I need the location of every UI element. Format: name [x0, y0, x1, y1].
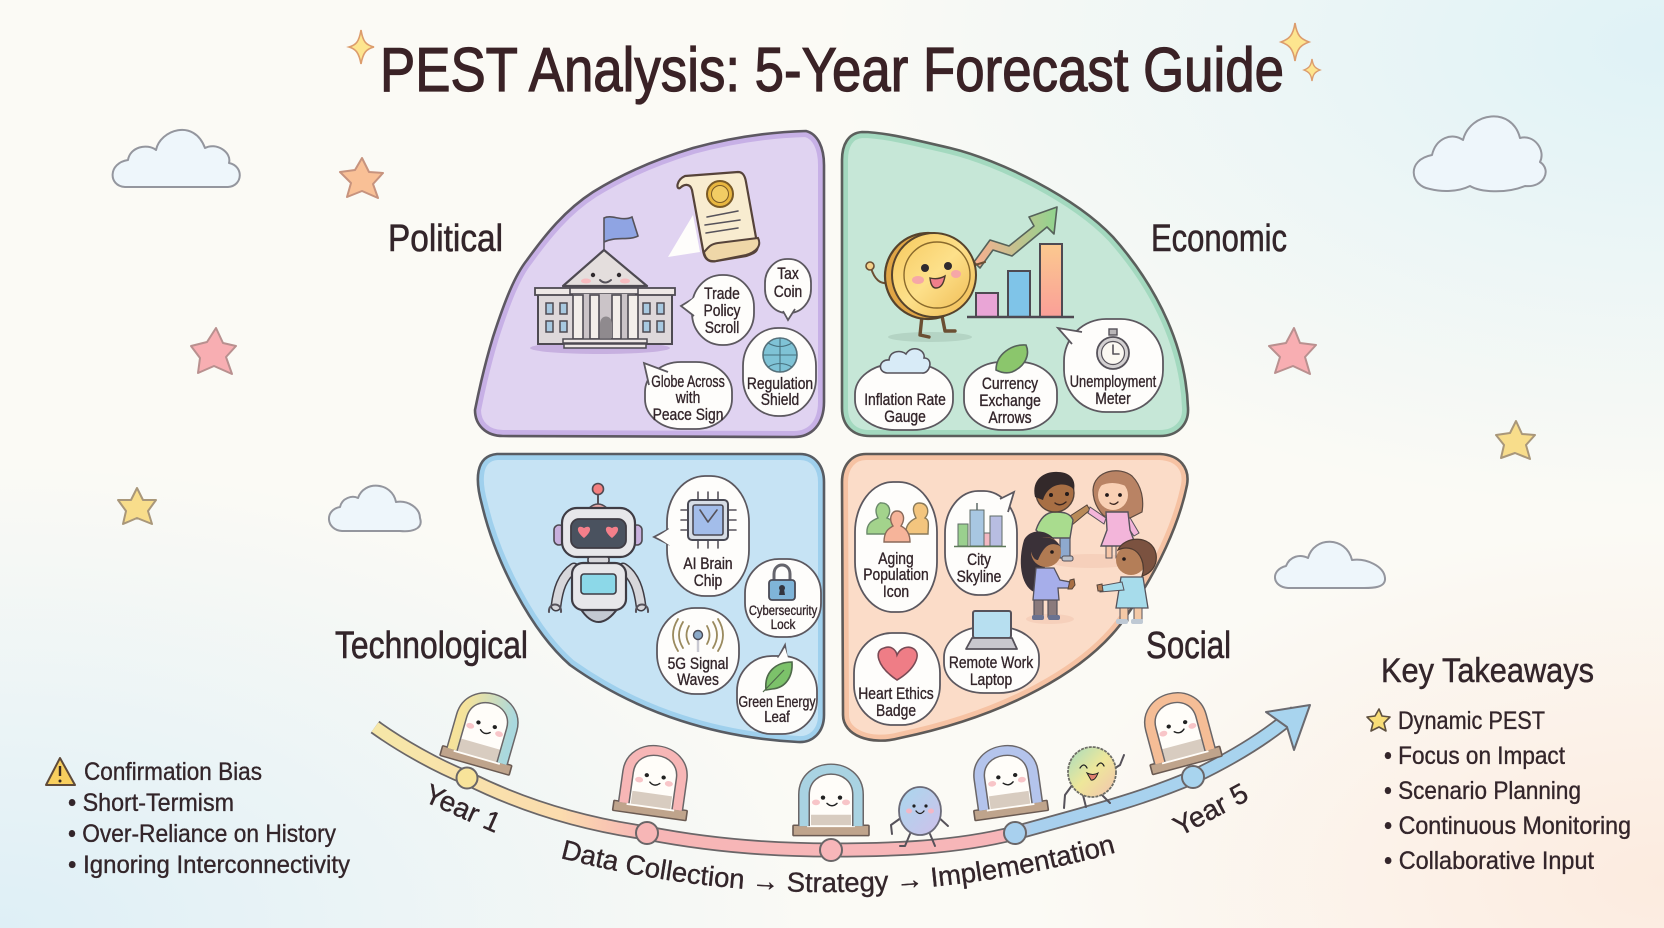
bubble: ai brain chip: Chip [694, 572, 722, 590]
bubble: currency exchange arrows: Arrows [988, 409, 1032, 427]
bubble: green energy leaf [737, 645, 817, 734]
bubble: trade policy scroll [681, 275, 754, 345]
bubble: cybersecurity lock: Lock [771, 616, 796, 632]
bubble: currency exchange arrows [964, 345, 1057, 430]
timeline: curved road with arrow [375, 705, 1310, 861]
star: top left [340, 158, 383, 198]
bubble: regulation shield: Regulation [747, 375, 813, 393]
bubble: aging population icon: Aging [878, 550, 914, 568]
label: process steps: Data Collection → Strategy → Implementation [562, 839, 1115, 898]
panel: social [842, 454, 1188, 741]
child: purple shirt girl [1021, 532, 1075, 620]
bubble: currency exchange arrows: Currency [982, 375, 1038, 393]
bubble: 5g signal waves: Waves [677, 671, 719, 689]
bubble: remote work laptop: Remote Work [949, 654, 1034, 672]
panel: economic [842, 132, 1188, 436]
bubble: tax coin: Coin [774, 283, 802, 301]
star: left yellow [118, 488, 156, 524]
bubble: currency exchange arrows: Exchange [979, 392, 1041, 410]
bubble: globe across with peace sign: Globe Across [651, 373, 725, 392]
bubble: 5g signal waves [657, 608, 739, 694]
milestone node: year 5 [1182, 766, 1204, 788]
bubble: trade policy scroll: Trade [704, 285, 740, 303]
bubble: tax coin: Tax [777, 265, 799, 283]
bubble: heart ethics badge: Badge [876, 702, 916, 720]
bubble: city skyline [945, 491, 1017, 595]
bubble: inflation rate gauge [855, 349, 953, 430]
text: short-termism: • Short-Termism [68, 789, 234, 817]
icon: robot [549, 484, 648, 622]
bubble: cybersecurity lock [745, 559, 821, 637]
blob character: rainbow [1064, 747, 1124, 808]
arrow head [1266, 705, 1310, 750]
heading: Social: Social [1146, 625, 1231, 667]
label: year 1: Year 1 [420, 778, 506, 839]
icon: government building [530, 217, 675, 354]
cloud: top right [1414, 116, 1546, 191]
text: collaborative input: • Collaborative Input [1384, 847, 1594, 875]
milestone node: year 1 [456, 768, 478, 788]
title: PEST Analysis: 5-Year Forecast Guide [380, 36, 1284, 105]
bubble: aging population icon: Population [863, 566, 929, 584]
bubble: globe across with peace sign [644, 362, 732, 429]
blob character: blue [891, 787, 948, 846]
bubble: globe across with peace sign: Peace Sign [653, 406, 723, 424]
arrow: growth [974, 207, 1057, 268]
text: focus on impact: • Focus on Impact [1384, 742, 1565, 770]
bubble: remote work laptop: Laptop [970, 671, 1012, 689]
bubble: inflation rate gauge: Inflation Rate [864, 391, 946, 409]
child: green shirt boy [1034, 472, 1090, 561]
milestone node: implementation [1004, 822, 1026, 844]
icon: warning triangle [46, 758, 75, 785]
bubble: remote work laptop [944, 611, 1039, 693]
bubble: city skyline: Skyline [957, 568, 1001, 586]
arch character: strategy [793, 769, 869, 836]
icon: sparkle right large [1281, 23, 1309, 61]
bubble: regulation shield [743, 328, 816, 416]
text: dynamic pest: Dynamic PEST [1398, 707, 1545, 735]
bubble: aging population icon: Icon [883, 583, 909, 601]
cloud: top left [113, 130, 240, 187]
bubble: unemployment meter: Unemployment [1070, 374, 1156, 391]
bubble: aging population icon [855, 482, 937, 612]
panel: pitfalls [46, 758, 350, 879]
icon: scroll [668, 172, 759, 261]
bubble: heart ethics badge [854, 633, 940, 725]
bubble: unemployment meter [1058, 319, 1163, 412]
bubble: tax coin [765, 259, 811, 320]
heading: Economic: Economic [1151, 218, 1287, 260]
heading: Political: Political [388, 218, 503, 260]
bubble: city skyline: City [967, 551, 991, 569]
arch character: data collection [613, 746, 695, 821]
bubble: green energy leaf: Green Energy [738, 693, 816, 710]
icon: sparkle right small [1304, 59, 1320, 81]
bubble: ai brain chip [654, 476, 749, 596]
icon: coin mascot [866, 233, 985, 342]
text: confirmation bias: Confirmation Bias [84, 758, 262, 786]
cloud: middle right [1275, 542, 1385, 588]
label: year 5: Year 5 [1168, 777, 1253, 842]
child: blue dress kid [1097, 539, 1156, 624]
panel: technological [478, 454, 824, 742]
milestone node: strategy [820, 839, 842, 861]
heading: Technological: Technological [335, 625, 528, 667]
icon: sparkle left [349, 30, 374, 64]
bubble: ai brain chip: AI Brain [683, 555, 733, 573]
bubble: heart ethics badge: Heart Ethics [858, 685, 934, 703]
bubble: unemployment meter: Meter [1095, 390, 1131, 408]
arch character: year 5 [1135, 689, 1222, 775]
star: left pink [191, 328, 236, 374]
arch character: implementation [966, 746, 1048, 821]
cloud: middle left [329, 486, 421, 531]
child: pink dress girl [1088, 471, 1143, 558]
bubble: inflation rate gauge: Gauge [884, 408, 926, 426]
arch character: year 1 [440, 689, 528, 775]
bubble: cybersecurity lock: Cybersecurity [749, 603, 818, 618]
text: ignoring interconnectivity: • Ignoring Interconnectivity [68, 851, 350, 879]
panel: key takeaways [1367, 652, 1631, 875]
milestone node: data collection [636, 822, 658, 844]
text: continuous monitoring: • Continuous Monitoring [1384, 812, 1631, 840]
bubble: 5g signal waves: 5G Signal [668, 655, 728, 673]
star: right yellow [1496, 421, 1535, 459]
bubble: green energy leaf: Leaf [764, 709, 791, 726]
star: right pink [1269, 328, 1316, 374]
icon: star [1367, 709, 1390, 731]
text: over-reliance on history: • Over-Reliance on History [68, 820, 336, 848]
bubble: globe across with peace sign: with [675, 389, 700, 407]
text: scenario planning: • Scenario Planning [1384, 777, 1581, 805]
bubble: regulation shield: Shield [761, 391, 799, 409]
chart: rising bars [967, 244, 1074, 317]
icon: group of children [1021, 471, 1156, 624]
bubble: trade policy scroll: Policy [704, 302, 741, 320]
bubble: trade policy scroll: Scroll [705, 319, 739, 337]
heading: key takeaways: Key Takeaways [1381, 652, 1594, 690]
panel: political [475, 131, 824, 437]
